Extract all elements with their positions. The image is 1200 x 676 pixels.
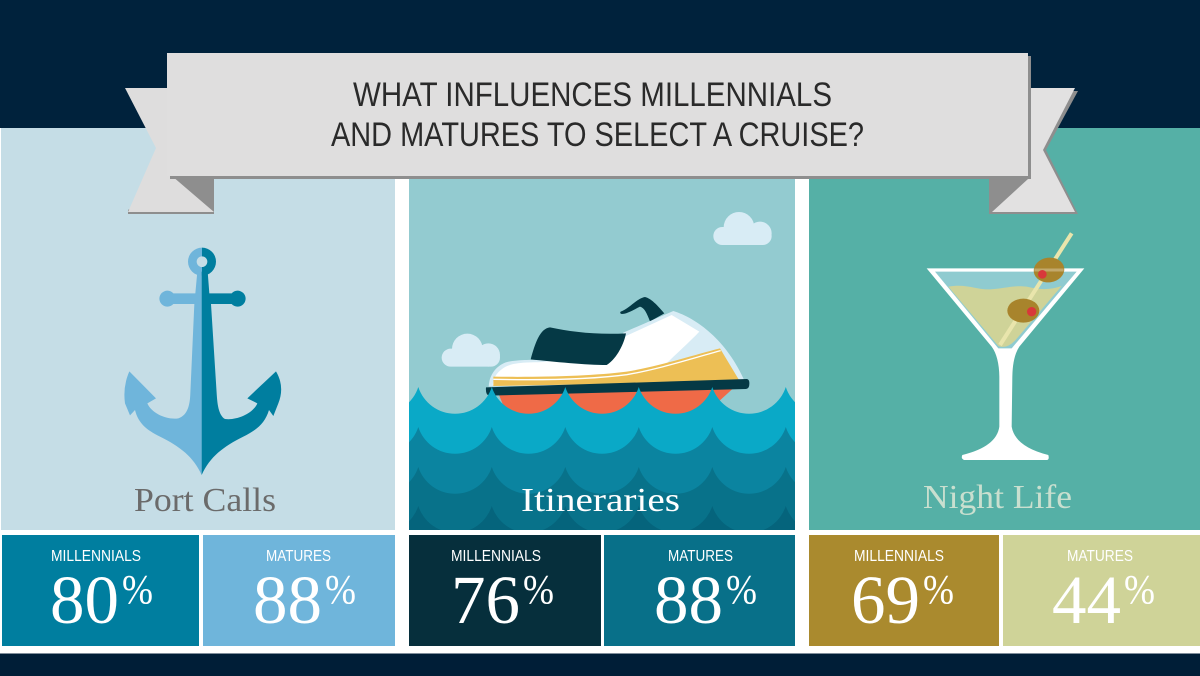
stat: port calls matures 88%: MATURES [266,548,331,565]
ribbon left tail [125,88,214,214]
label: Night Life: Night Life [923,479,1072,516]
stat: itineraries millennials 76%: % [523,566,554,612]
stat: night life millennials 69% [809,535,999,646]
stat: port calls millennials 80%: % [122,566,153,612]
stat: night life millennials 69%: MILLENNIALS [854,548,944,565]
ribbon main band [167,53,1031,179]
stat: port calls millennials 80%: 80 [50,562,119,638]
title ribbon [125,53,1078,214]
stat: itineraries matures 88%: % [726,566,757,612]
label: Port Calls: Port Calls [134,482,276,519]
title text: WHAT INFLUENCES MILLENNIALS [353,76,832,114]
panel: itineraries [409,179,795,530]
icon: clouds [442,212,772,367]
stat: itineraries matures 88%: 88 [654,562,723,638]
stat: night life matures 44% [1003,535,1200,646]
stat: night life matures 44%: MATURES [1067,548,1133,565]
icon: jet ski [486,297,749,422]
panel: port calls [1,128,395,530]
panel: night life [809,128,1200,530]
stat: port calls millennials 80% [2,535,199,646]
stat: night life matures 44%: % [1124,566,1155,612]
stat: night life millennials 69%: 69 [851,562,920,638]
stat: itineraries millennials 76% [409,535,601,646]
stat: night life millennials 69%: % [923,566,954,612]
label: Itineraries: Itineraries [521,482,680,519]
stat: night life matures 44%: 44 [1052,562,1121,638]
stat: port calls matures 88%: 88 [253,562,322,638]
icon: martini glass [927,233,1084,460]
ribbon right tail [989,88,1078,214]
title text [331,76,864,154]
stat: itineraries matures 88% [604,535,795,646]
stat: port calls matures 88%: % [325,566,356,612]
stat: itineraries millennials 76%: MILLENNIALS [451,548,541,565]
icon: anchor [124,248,281,475]
title text: AND MATURES TO SELECT A CRUISE? [331,116,864,154]
stat: itineraries millennials 76%: 76 [451,562,520,638]
waves [409,387,795,530]
stat: port calls millennials 80%: MILLENNIALS [51,548,141,565]
stat: port calls matures 88% [203,535,395,646]
stat: itineraries matures 88%: MATURES [668,548,733,565]
